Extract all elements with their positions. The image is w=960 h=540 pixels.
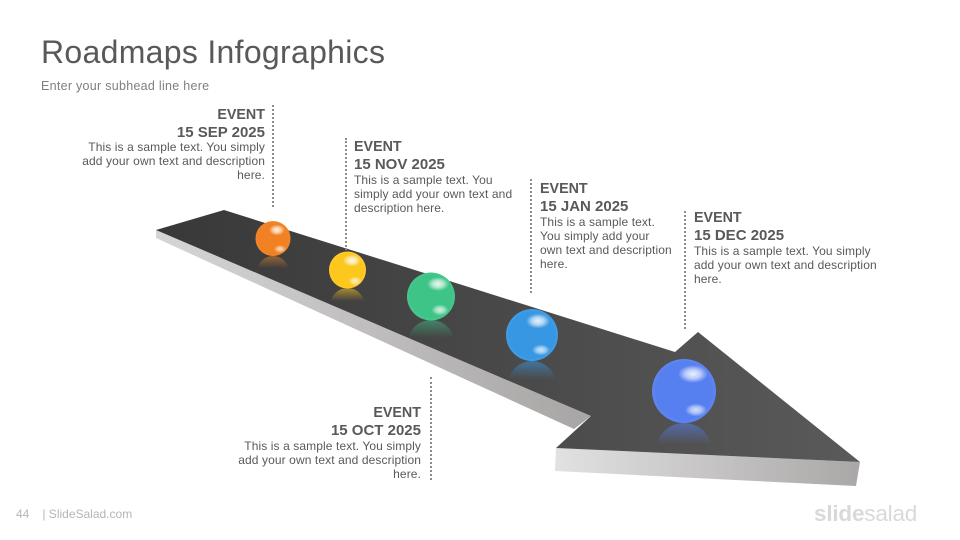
event: 15 Oct 2025: 15 OCT 2025: [331, 422, 421, 439]
event: 15 Jan 2025: [540, 181, 672, 271]
arrow shaft side face: [156, 230, 591, 429]
event: 15 Jan 2025: here.: [540, 257, 568, 271]
event: 15 Dec 2025: 15 DEC 2025: [694, 227, 784, 244]
sphere: blue: [506, 309, 558, 409]
event: 15 Jan 2025: This is a sample text.: [540, 215, 655, 229]
event: 15 Oct 2025: add your own text and description: [238, 453, 421, 467]
event: 15 Dec 2025: [694, 210, 877, 286]
event: 15 Sep 2025: [82, 107, 265, 182]
event: 15 Sep 2025: This is a sample text. You simply: [88, 140, 265, 154]
event: 15 Oct 2025: EVENT: [373, 405, 421, 421]
event: 15 Jan 2025: EVENT: [540, 181, 588, 197]
page number and footer: 44 | SlideSalad.com: [16, 507, 132, 521]
sphere: indigo: [652, 359, 716, 479]
connector: 15 Sep: [272, 105, 274, 207]
event: 15 Sep 2025: here.: [237, 168, 265, 182]
event: 15 Nov 2025: 15 NOV 2025: [354, 156, 445, 173]
connector: 15 Nov: [345, 138, 347, 250]
event: 15 Jan 2025: own text and description: [540, 243, 672, 257]
event: 15 Sep 2025: 15 SEP 2025: [177, 124, 265, 141]
event: 15 Nov 2025: [354, 139, 512, 215]
connector: 15 Dec: [684, 211, 686, 329]
event: 15 Oct 2025: This is a sample text. You simply: [244, 439, 421, 453]
event: 15 Dec 2025: This is a sample text. You simply: [694, 244, 871, 258]
event: 15 Nov 2025: EVENT: [354, 139, 402, 155]
event: 15 Jan 2025: 15 JAN 2025: [540, 198, 628, 215]
event: 15 Sep 2025: EVENT: [217, 107, 265, 123]
event: 15 Oct 2025: here.: [393, 467, 421, 481]
event: 15 Nov 2025: description here.: [354, 201, 444, 215]
event: 15 Sep 2025: add your own text and description: [82, 154, 265, 168]
event: 15 Dec 2025: EVENT: [694, 210, 742, 226]
title: Roadmaps Infographics: [41, 34, 385, 70]
sphere: green: [407, 272, 455, 366]
sphere: yellow: [329, 252, 366, 322]
arrow top face: [156, 210, 860, 462]
event: 15 Dec 2025: add your own text and description: [694, 258, 877, 272]
event: 15 Oct 2025: [238, 405, 421, 481]
event: 15 Jan 2025: You simply add your: [540, 229, 650, 243]
event: 15 Nov 2025: This is a sample text. You: [354, 173, 493, 187]
event: 15 Dec 2025: here.: [694, 272, 722, 286]
logo wordmark: slidesalad: [814, 501, 917, 526]
event: 15 Nov 2025: simply add your own text and: [354, 187, 512, 201]
sphere: orange: [256, 221, 290, 288]
arrow head side face: [555, 448, 860, 486]
subhead: Enter your subhead line here: [41, 79, 209, 93]
connector: 15 Oct: [430, 377, 432, 480]
connector: 15 Jan: [530, 179, 532, 293]
